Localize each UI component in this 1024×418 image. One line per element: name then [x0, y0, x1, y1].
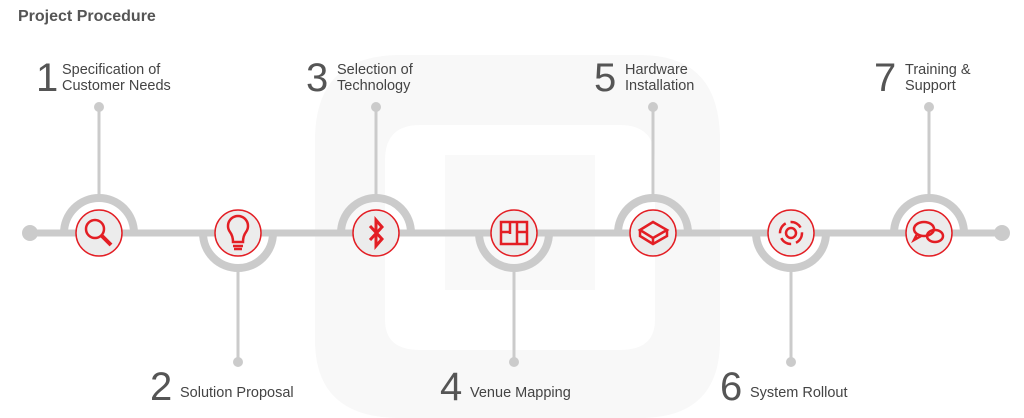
step 2 — [150, 365, 294, 409]
step 6 — [720, 365, 848, 409]
text: Selection of — [337, 62, 413, 78]
text: Venue Mapping — [470, 385, 571, 401]
icon: gear cycle — [780, 222, 802, 244]
text: Hardware — [625, 62, 688, 78]
text: 3 — [306, 56, 328, 100]
text: 5 — [594, 56, 616, 100]
text: System Rollout — [750, 385, 848, 401]
icon: chat — [914, 222, 943, 242]
text: 1 — [36, 56, 58, 100]
step 3 — [306, 56, 413, 100]
text: Training & — [905, 62, 971, 78]
text: Support — [905, 78, 956, 94]
icon: floor plan — [501, 222, 527, 244]
step 4 — [440, 365, 571, 409]
step 1 — [36, 56, 171, 100]
icon: bulb — [228, 216, 248, 249]
icon: magnifier — [86, 220, 111, 245]
step 7 — [874, 56, 971, 100]
step 5 — [594, 56, 694, 100]
text: Technology — [337, 78, 410, 94]
text: 2 — [150, 365, 172, 409]
text: 4 — [440, 365, 462, 409]
title: Project Procedure — [18, 8, 156, 25]
text: Solution Proposal — [180, 385, 294, 401]
text: 7 — [874, 56, 896, 100]
text: 6 — [720, 365, 742, 409]
icon: bluetooth — [370, 220, 382, 246]
text: Installation — [625, 78, 694, 94]
text: Customer Needs — [62, 78, 171, 94]
icon: box — [640, 222, 667, 244]
text: Specification of — [62, 62, 160, 78]
